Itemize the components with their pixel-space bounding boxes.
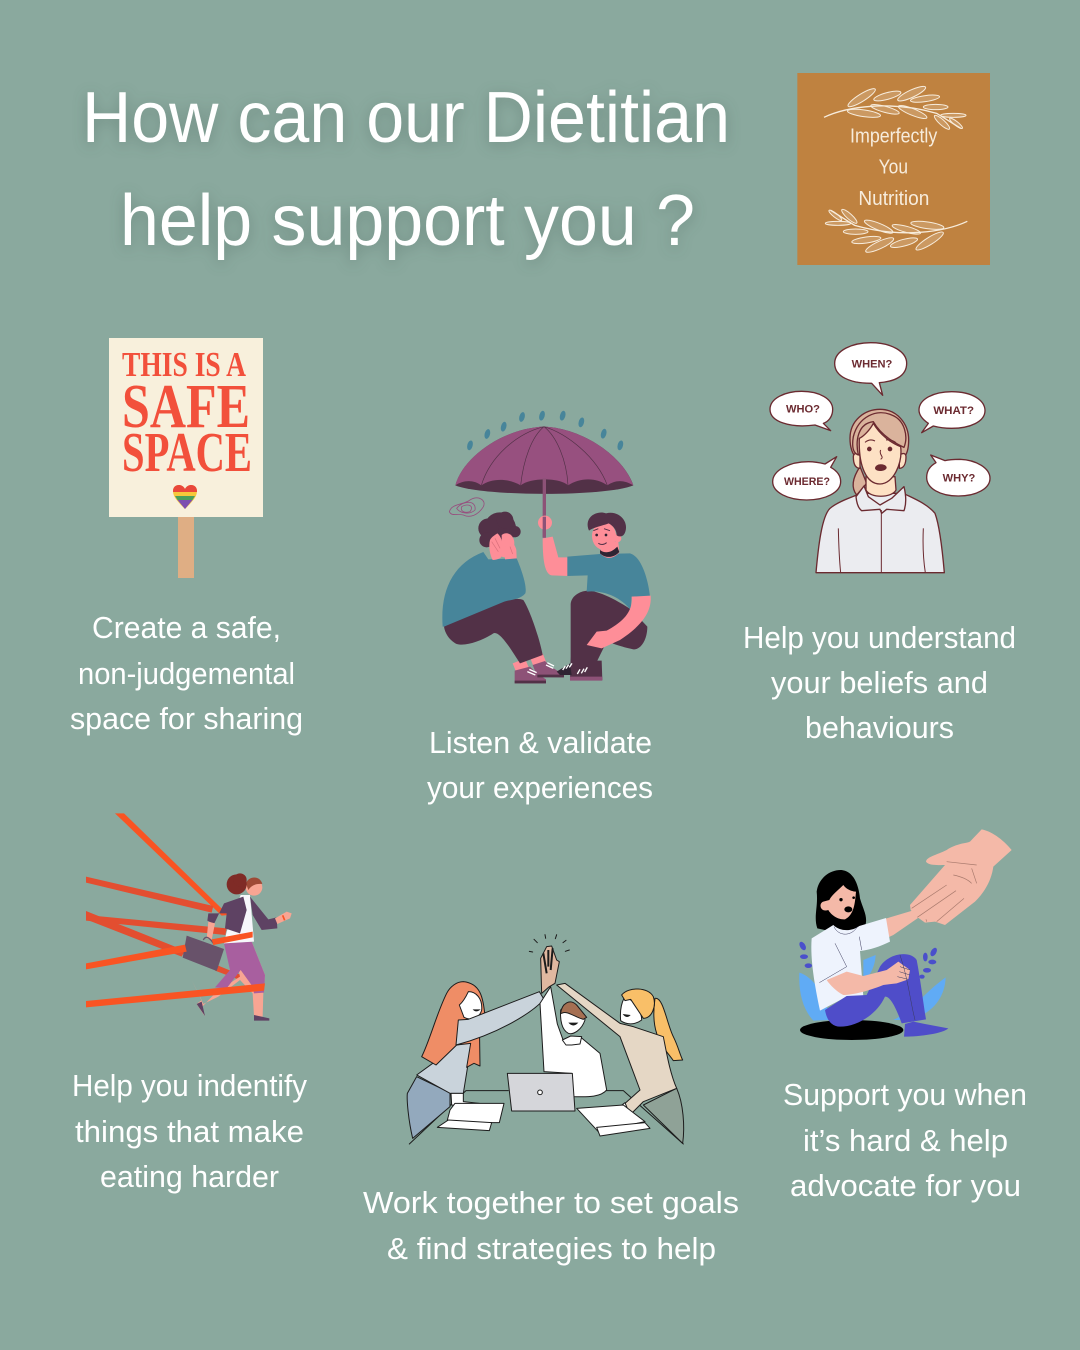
icon: helping hand reaching seated woman: [798, 829, 1012, 1040]
icon: woman with question bubbles: WHERE?: [784, 476, 830, 488]
text: support and advocate: [783, 1077, 1027, 1203]
logo: Imperfectly You Nutrition: [797, 73, 990, 265]
text: understand beliefs: Help you understand: [743, 620, 1016, 655]
text: support and advocate: Support you when: [783, 1077, 1027, 1112]
icon: woman with question bubbles: WHO?: [786, 404, 820, 416]
text: identify barriers: things that make: [75, 1114, 304, 1149]
title: [82, 78, 730, 261]
icon: woman with question bubbles: WHEN?: [852, 358, 892, 370]
icon: woman with question bubbles: WHAT?: [933, 405, 974, 417]
icon: woman running tied by red ribbons: [86, 813, 292, 1021]
text: create a safe space: [70, 610, 303, 736]
text: understand beliefs: [743, 620, 1016, 745]
right person: [570, 591, 647, 680]
panel: identify barriers: [72, 813, 307, 1194]
title: How can our Dietitian: [82, 78, 730, 158]
text: work together: & find strategies to help: [387, 1231, 716, 1266]
text: work together: Work together to set goals: [363, 1185, 739, 1220]
text: create a safe space: Create a safe,: [92, 610, 281, 645]
text: listen and validate: [427, 725, 653, 805]
text: support and advocate: advocate for you: [790, 1168, 1021, 1203]
text: identify barriers: eating harder: [100, 1159, 279, 1194]
text: understand beliefs: your beliefs and: [771, 665, 988, 700]
icon: safe space sign: THIS IS A: [122, 345, 247, 384]
icon: woman with question bubbles: WHY?: [943, 472, 975, 484]
icon: team high five around a table: [407, 935, 684, 1144]
text: understand beliefs: behaviours: [805, 710, 954, 745]
panel: safe space: [70, 338, 303, 736]
title: help support you ?: [120, 181, 695, 261]
panel: listen and validate: [427, 410, 653, 805]
icon: woman with question bubbles: [770, 343, 990, 573]
text: identify barriers: [72, 1068, 307, 1194]
icon: two people under umbrella: [442, 410, 651, 683]
logo: Imperfectly You Nutrition: Nutrition: [858, 188, 929, 210]
text: listen and validate: Listen & validate: [429, 725, 652, 760]
logo: Imperfectly You Nutrition: Imperfectly: [850, 125, 937, 147]
icon: safe space sign: SAFE: [122, 373, 250, 441]
panel: beliefs and behaviours: [743, 343, 1016, 745]
text: support and advocate: it’s hard & help: [803, 1123, 1008, 1158]
icon: safe space sign: [109, 338, 263, 578]
text: work together: [363, 1185, 739, 1266]
text: listen and validate: your experiences: [427, 770, 653, 805]
icon: safe space sign: SPACE: [122, 422, 252, 484]
logo: Imperfectly You Nutrition: You: [879, 156, 908, 178]
text: create a safe space: non-judgemental: [78, 656, 295, 691]
panel: support and advocate: [783, 829, 1027, 1203]
panel: work together: [363, 935, 739, 1266]
left person: [513, 653, 547, 672]
text: create a safe space: space for sharing: [70, 701, 303, 736]
text: identify barriers: Help you indentify: [72, 1068, 307, 1103]
